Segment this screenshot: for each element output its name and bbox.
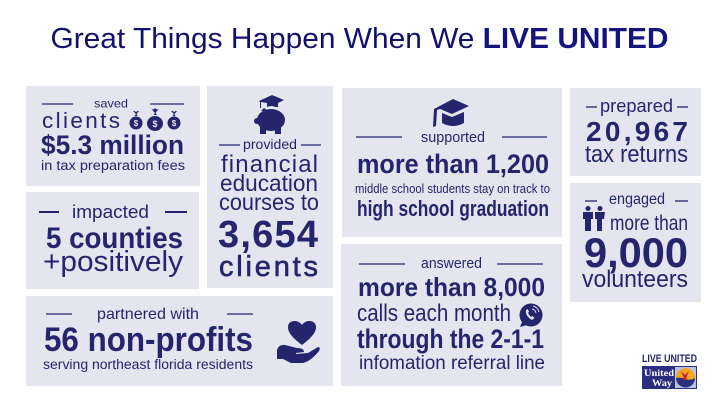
text: financial education courses to: financial xyxy=(221,151,318,178)
text: volunteers: volunteers xyxy=(582,266,688,293)
logo wordmark: United xyxy=(644,369,675,379)
icon: money bags: $ xyxy=(172,119,177,128)
icon: heart in hand xyxy=(277,321,320,363)
heading: impacted: impacted xyxy=(72,202,149,222)
text: financial education courses to: education xyxy=(220,170,318,196)
text: tax returns: tax returns xyxy=(585,141,688,168)
heading: provided: provided xyxy=(243,136,297,152)
heading: saved: saved xyxy=(94,96,128,110)
heading: prepared: prepared xyxy=(600,95,673,116)
panel: partnered non-profits xyxy=(26,296,333,386)
panel: prepared tax returns xyxy=(570,88,701,176)
title: Great Things Happen When We LIVE UNITED xyxy=(50,23,668,55)
text: $5.3 million: $5.3 million xyxy=(41,130,184,160)
text: more than 1,200: more than 1,200 xyxy=(357,149,549,179)
text: infomation referral line: infomation referral line xyxy=(359,353,545,374)
text: through the 2-1-1: through the 2-1-1 xyxy=(357,324,544,354)
panel: saved clients xyxy=(26,86,200,186)
icon: money bags: $ xyxy=(134,119,139,128)
text: in tax preparation fees: in tax preparation fees xyxy=(41,158,185,173)
text: more than 8,000: more than 8,000 xyxy=(358,272,545,302)
text: positively: +positively xyxy=(43,246,184,278)
text: 20,967: 20,967 xyxy=(586,116,688,147)
panel: impacted counties xyxy=(26,192,199,289)
text: 3,654: 3,654 xyxy=(218,214,318,256)
icon: phone bubble xyxy=(520,304,542,327)
panel: supported students xyxy=(342,88,562,237)
panel: financial education xyxy=(207,86,333,288)
text: more than: more than xyxy=(610,212,688,235)
logo wordmark xyxy=(644,369,675,389)
logo tagline: LIVE UNITED xyxy=(642,353,697,365)
panel: answered calls xyxy=(341,244,562,386)
logo box xyxy=(642,366,697,389)
text: high school graduation: high school graduation xyxy=(357,196,549,221)
icon: money bags xyxy=(130,108,180,131)
text: clients: clients xyxy=(42,108,120,133)
logo emblem xyxy=(675,367,696,388)
icon: money bags: $ xyxy=(152,119,158,129)
text: 9,000: 9,000 xyxy=(584,229,688,276)
heading: provided xyxy=(219,136,321,152)
text: middle school students: middle school students stay on track to xyxy=(355,181,550,196)
heading: partnered with: partnered with xyxy=(97,306,199,323)
panel: engaged volunteers xyxy=(570,183,701,302)
icon: two people xyxy=(583,206,605,231)
text: clients: clients xyxy=(219,251,318,283)
heading: engaged: engaged xyxy=(609,191,665,208)
icon: piggy bank with cap xyxy=(254,95,285,134)
text: 5 counties: 5 counties xyxy=(46,222,183,255)
logo wordmark: Way xyxy=(652,379,672,389)
heading: supported: supported xyxy=(421,129,485,146)
heading: answered: answered xyxy=(421,255,482,272)
text: financial education courses to xyxy=(219,151,319,215)
text: 56 non-profits: 56 non-profits xyxy=(44,321,253,359)
text: serving northeast florida residents: serving northeast florida residents xyxy=(43,357,253,372)
text: financial education courses to: courses to xyxy=(219,189,319,215)
icon: graduation cap xyxy=(433,99,469,127)
text: calls each month: calls each month xyxy=(357,300,511,327)
logo: Live United United Way xyxy=(642,353,697,389)
